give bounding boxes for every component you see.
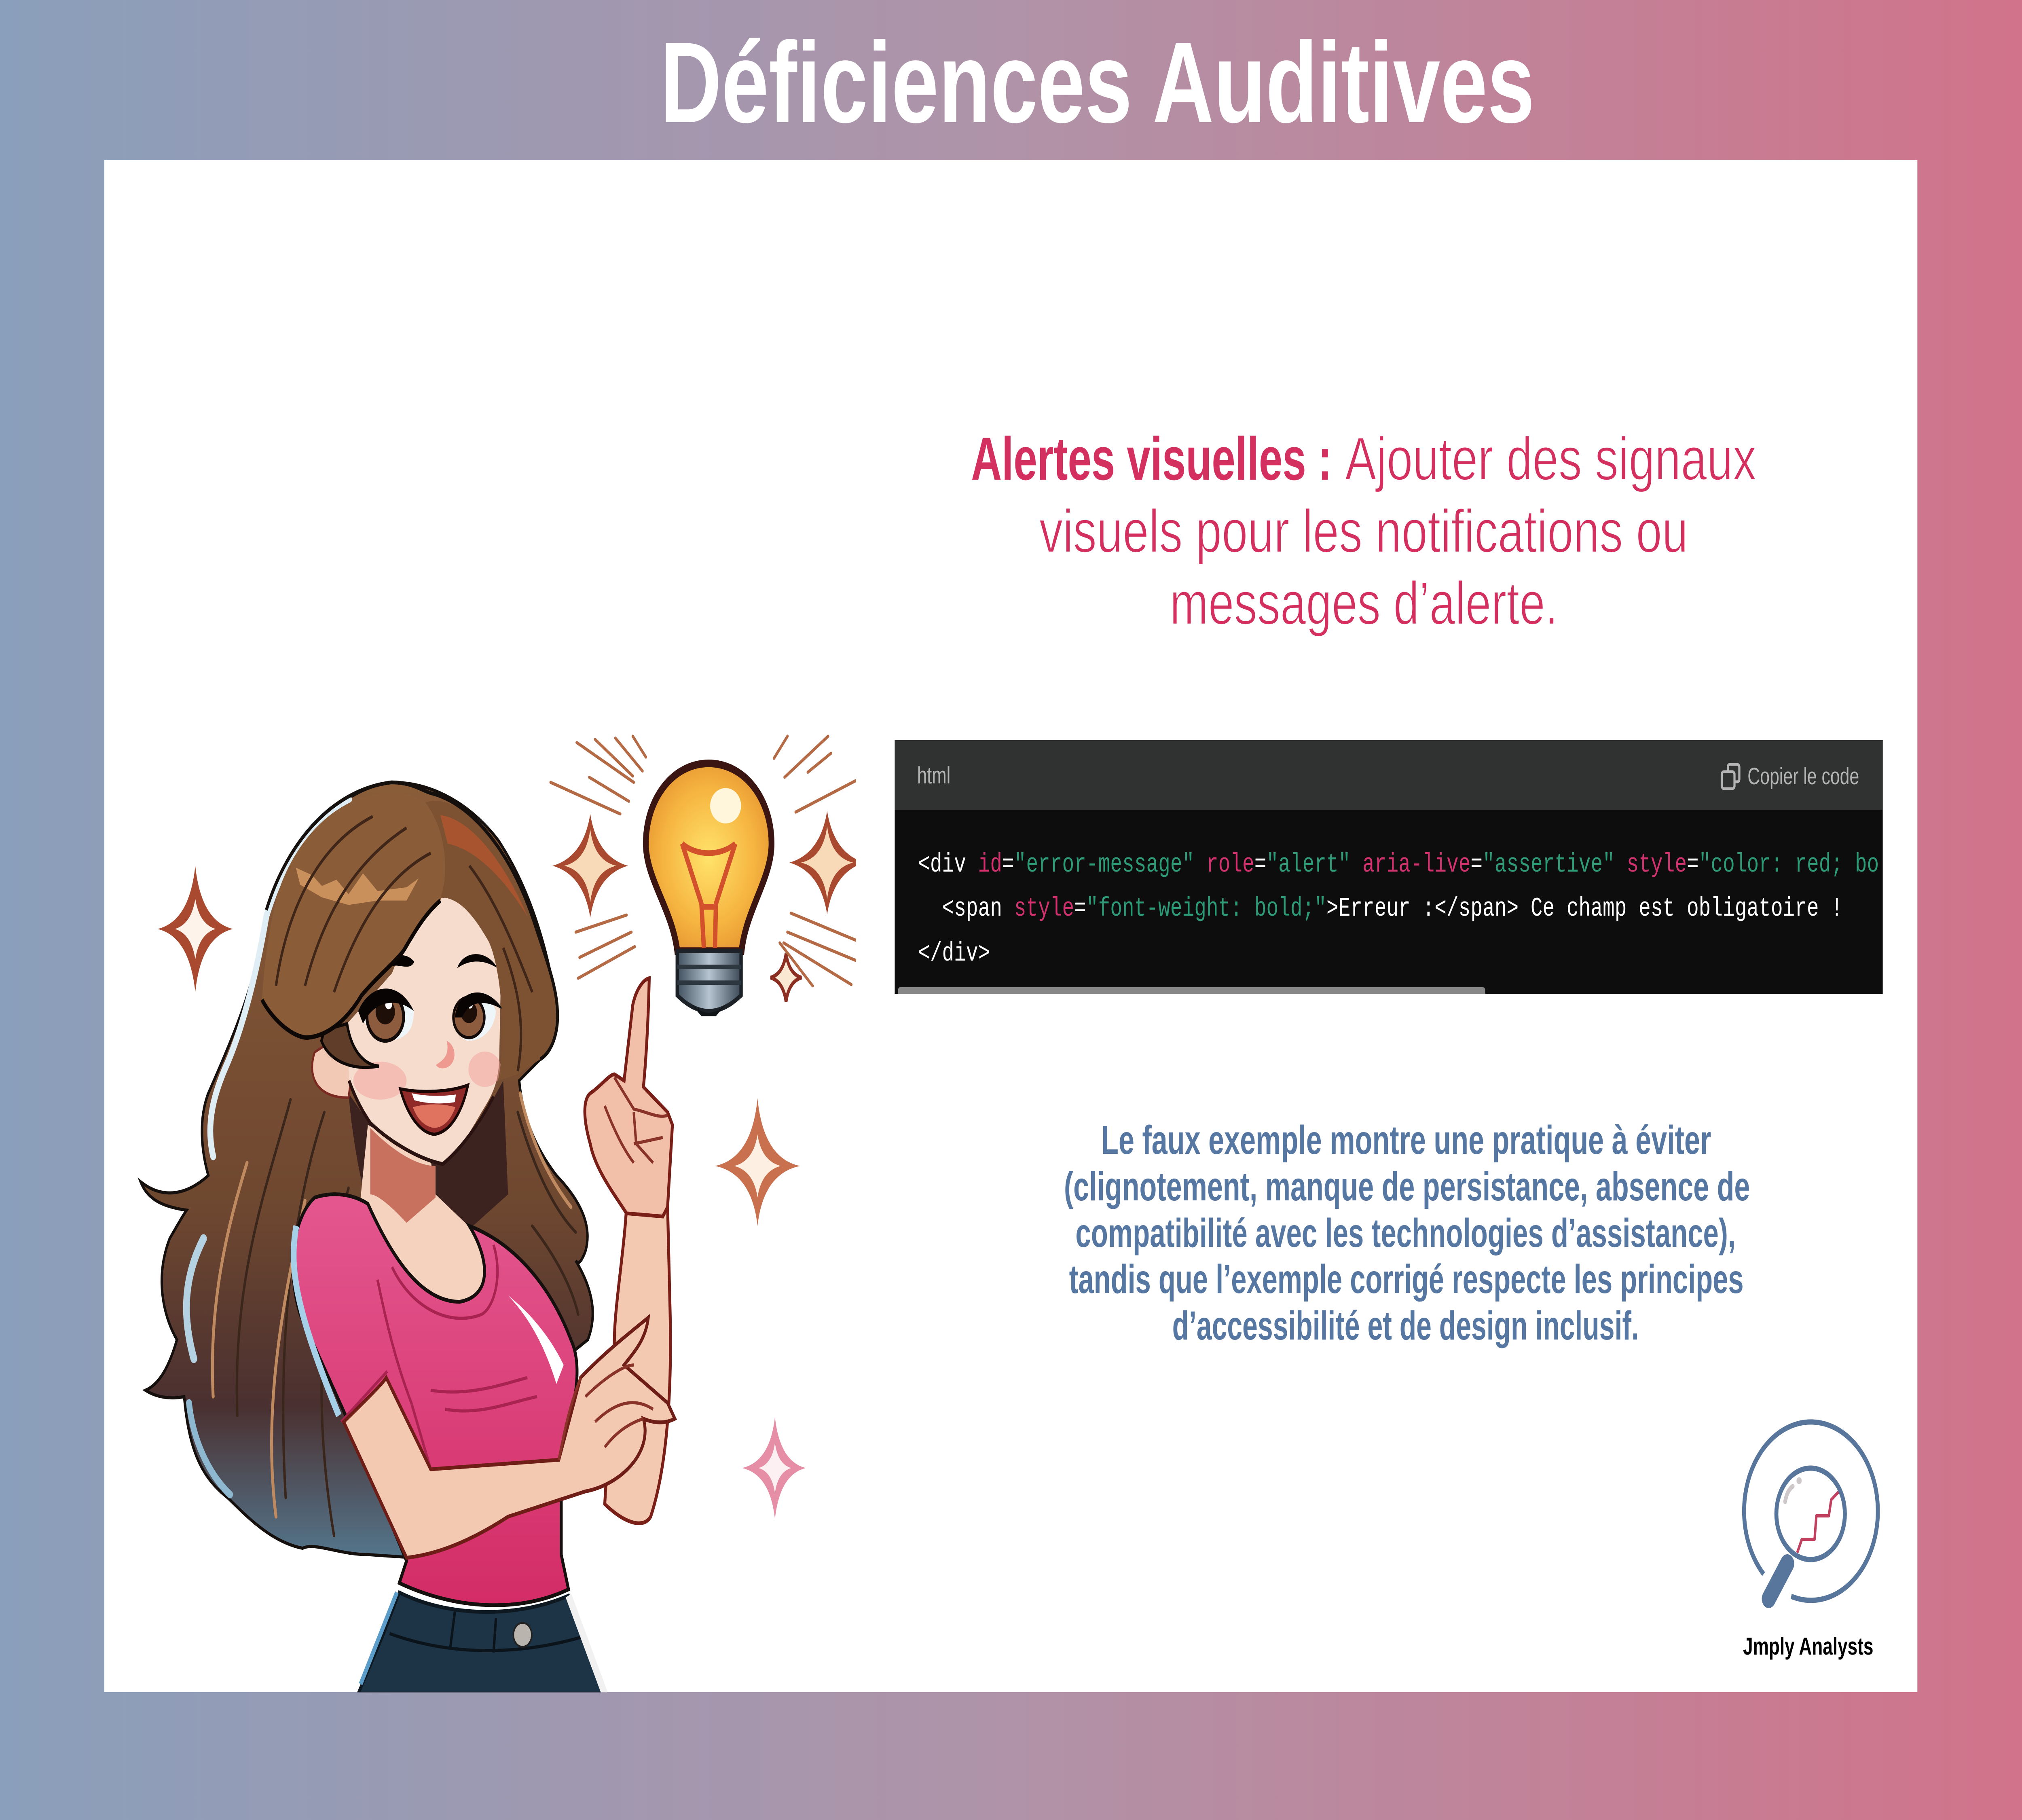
hair shine band [296,868,419,905]
sparkle near bulb right [789,811,865,914]
ear [312,1046,353,1098]
logo chart line [1797,1492,1838,1553]
bold lead-in: Alertes visuelles : [971,425,1332,493]
front hair fringe [262,792,445,1038]
crossing arm and hand [344,1318,675,1558]
explanation paragraph [1064,1117,1750,1348]
hair back [141,782,593,1561]
finger creases [605,1077,668,1163]
jaw outline [349,1081,493,1164]
sleeve highlight [294,1226,339,1416]
copy label: Copier le code [1747,763,1859,789]
light bulb [646,764,772,1016]
code line 2: <span style="font-weight: bold;">Erreur :</span> Ce champ est obligatoire ! [918,893,1843,924]
heading: visual alerts text [971,425,1756,637]
belt line and button [361,1593,605,1694]
hair outline top [266,782,558,1059]
light rays [551,736,856,986]
logo handle [1769,1564,1787,1599]
white content panel [104,160,1917,1692]
raised hand with pointing finger [585,978,673,1217]
paragraph line 3: compatibilité avec les technologies d’assistance), [1075,1210,1736,1255]
logo outer ring [1744,1422,1878,1600]
sparkle left [158,866,233,992]
small sparkle [770,954,802,1002]
text line 3: messages d’alerte. [1170,569,1558,637]
text line 1: Ajouter des signaux [1345,425,1756,493]
fringe strands [276,817,532,1071]
left eye [358,988,414,1041]
paragraph line 1: Le faux exemple montre une pratique à éviter [1101,1117,1711,1162]
paragraph line 2: (clignotement, manque de persistance, absence de [1064,1164,1750,1209]
logo lens [1777,1468,1845,1560]
illustration: girl pointing at light bulb [141,736,865,1694]
hair curl over cheek [321,1024,379,1067]
code line 3: </div> [918,938,990,969]
right hair lock [425,801,558,1081]
paragraph line 5: d’accessibilité et de design inclusif. [1172,1303,1639,1348]
hand creases [559,1365,653,1460]
eyebrows [370,954,497,969]
paragraph line 4: tandis que l’exemple corrigé respecte les principes [1069,1256,1744,1302]
right eye [453,993,503,1041]
shirt highlight [508,1295,564,1384]
icon: copy [1722,764,1739,789]
mouth [400,1085,468,1134]
cheeks blush [353,1052,501,1100]
code line 1: <div id="error-message" role="alert" aria-live="assertive" style="color: red; bo [918,849,1879,880]
jeans [358,1593,605,1694]
logo: Jmply Analysts [1743,1422,1878,1660]
code block [895,740,1883,994]
text line 2: visuels pour les notifications ou [1039,497,1688,565]
pink sparkle [742,1417,806,1519]
code body [895,740,1883,994]
logo lens glare [1785,1481,1799,1502]
neck and chest [361,1125,488,1305]
language label: html [917,762,950,788]
hair highlights and strands [186,800,578,1536]
shirt seams [341,1245,537,1469]
title: Déficiences Auditives [660,19,1535,147]
scrollbar [898,987,1485,994]
dark hair behind neck [349,1081,508,1229]
neck shadow [370,1128,436,1223]
face [347,896,501,1163]
logo name: Jmply Analysts [1743,1633,1874,1660]
shirt torso [293,1194,577,1605]
code header bar [895,740,1883,810]
red hair shine right [440,815,527,916]
sparkle under bulb [715,1098,800,1226]
fringe lower edge [262,901,440,1038]
nose [436,1041,455,1068]
raised forearm and lower arm back [605,1207,670,1523]
sparkle near bulb left [552,814,628,918]
